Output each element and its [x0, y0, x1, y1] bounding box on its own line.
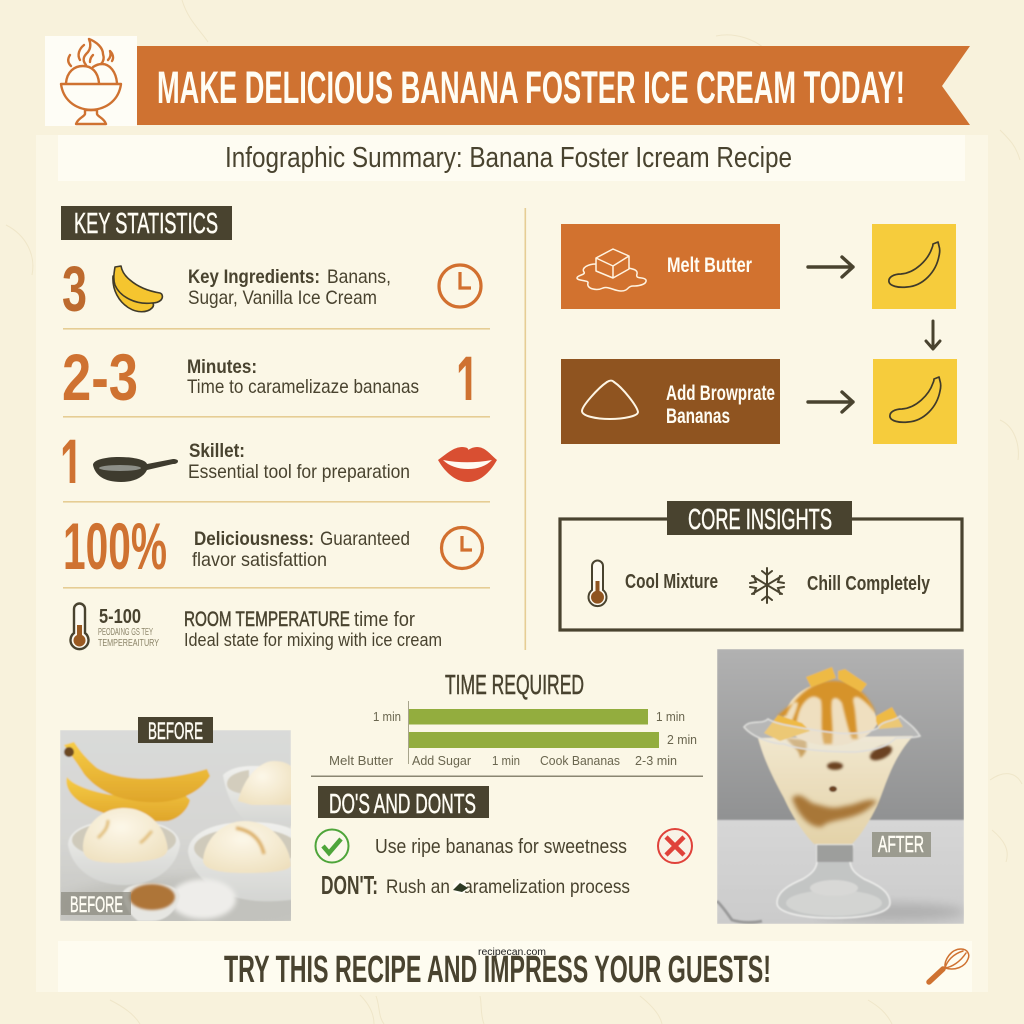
icon: thermometer — [588, 560, 606, 606]
do's and don'ts: DON'T: — [321, 870, 378, 900]
time required chart: TIME REQUIRED — [445, 669, 584, 700]
watermark: recipecan.com — [478, 947, 546, 958]
icon: melting butter — [577, 249, 646, 291]
bananas — [64, 742, 210, 821]
step: add brown sugar: Add Browprate — [666, 382, 775, 405]
step: banana tile — [873, 359, 957, 444]
do's and don'ts: Use ripe bananas for sweetness — [375, 836, 627, 858]
before label bottom — [61, 892, 131, 917]
stat row: 100% deliciousness: flavor satisfattion — [192, 549, 327, 571]
after label — [872, 831, 931, 857]
stat row: skillet: 1 — [60, 424, 83, 507]
stat row: 2-3 minutes: 1 — [456, 341, 479, 424]
step: add brown sugar — [561, 359, 780, 444]
core insights heading — [667, 501, 852, 536]
arrow — [808, 257, 853, 277]
subtitle band — [58, 135, 965, 181]
right bowl — [188, 820, 291, 902]
icon: bananas — [113, 266, 162, 312]
icon: whisk — [929, 949, 969, 982]
subtitle band: Infographic Summary: Banana Foster Icream Recipe — [225, 142, 792, 174]
stat row: 3 key ingredients — [62, 253, 481, 325]
do's and don'ts: Rush an caramelization process — [386, 876, 630, 898]
stat row: 3 key ingredients: 3 — [62, 253, 87, 325]
arrow — [808, 392, 853, 412]
step: add brown sugar: Bananas — [666, 405, 730, 428]
glitch mark — [453, 880, 468, 894]
time required chart: Add Sugar — [412, 753, 472, 768]
time required chart: 2-3 min — [635, 753, 677, 768]
before label bottom: BEFORE — [70, 892, 123, 917]
left bowl — [68, 808, 180, 885]
stat row: 3 key ingredients: Banans, — [327, 266, 391, 288]
glass bowl contents — [758, 736, 913, 844]
stat row: room temperature — [71, 604, 442, 650]
stat row: room temperature: TEMPEREAITURY — [98, 638, 159, 649]
key statistics heading: KEY STATISTICS — [74, 208, 218, 240]
icon: cross — [658, 829, 692, 863]
main panel — [36, 135, 988, 992]
stat row: 100% deliciousness: Guaranteed — [320, 528, 410, 550]
back bowl and scoop — [223, 761, 293, 826]
stat row: 100% deliciousness — [63, 509, 482, 583]
icon: snowflake — [750, 568, 784, 603]
glass foot and stem — [777, 845, 890, 918]
title banner — [137, 46, 970, 125]
sugar — [123, 879, 236, 921]
time required chart: Cook Bananas — [540, 753, 620, 768]
stat row: 2-3 minutes: Minutes: — [187, 356, 257, 378]
after label: AFTER — [878, 831, 924, 857]
stat row: 2-3 minutes: 2-3 — [62, 340, 138, 414]
stat row: 2-3 minutes: Time to caramelizaze bananas — [187, 376, 419, 398]
icon: clock — [442, 528, 482, 568]
time required chart: Melt Butter — [329, 753, 394, 768]
before label top: BEFORE — [148, 718, 203, 745]
key statistics heading — [61, 206, 232, 240]
stat row: skillet: Essential tool for preparation — [188, 461, 410, 483]
stat row: room temperature: ROOM TEMPERATURE — [184, 608, 350, 631]
do's and don'ts — [316, 786, 692, 900]
stat row: room temperature: time for — [354, 609, 415, 631]
step: melt butter: Melt Butter — [667, 254, 752, 277]
icon: skillet — [93, 457, 178, 482]
after photo — [717, 649, 965, 924]
core insights box: Cool Mixture — [625, 571, 718, 593]
time required chart: 1 min — [492, 753, 520, 768]
spoon — [717, 901, 762, 922]
do's and don'ts: DO'S AND DONTS — [329, 788, 476, 819]
call to action band — [58, 941, 972, 992]
stat row: room temperature: PEODAING GS TEY — [98, 627, 153, 638]
time required chart — [311, 669, 703, 777]
core insights heading: CORE INSIGHTS — [688, 504, 832, 536]
icon: check — [316, 830, 348, 862]
icon: clock — [439, 265, 481, 307]
scoop and caramel — [777, 681, 877, 746]
step: melt butter — [561, 224, 780, 309]
time required chart: 1 min — [656, 709, 685, 724]
icon: thermometer — [71, 604, 88, 649]
time required chart: 1 min — [373, 709, 401, 724]
core insights box: Chill Completely — [807, 573, 931, 595]
step: banana tile — [872, 224, 956, 309]
before label top — [138, 717, 213, 745]
time required chart: 2 min — [667, 732, 697, 747]
icon: lips — [438, 447, 497, 482]
stat row: 3 key ingredients: Sugar, Vanilla Ice Cream — [188, 287, 377, 309]
icon box: ice cream sundae — [45, 36, 137, 126]
icon: sugar pile — [582, 380, 638, 419]
stat row: room temperature: Ideal state for mixing with ice cream — [184, 629, 442, 650]
banana chunks — [764, 667, 903, 741]
glass rim — [744, 716, 920, 752]
before photo — [60, 717, 291, 921]
stat row: skillet: Skillet: — [189, 440, 245, 462]
stat row: 100% deliciousness: Deliciousness: — [194, 528, 314, 550]
stat row: skillet — [62, 440, 497, 483]
arrow — [926, 321, 940, 349]
core insights box — [560, 501, 962, 630]
stat row: 2-3 minutes — [64, 354, 472, 400]
stat row: room temperature: 5-100 — [99, 606, 141, 628]
stat row: 3 key ingredients: Key Ingredients: — [188, 266, 320, 288]
stat row: 100% deliciousness: 100% — [63, 509, 167, 583]
